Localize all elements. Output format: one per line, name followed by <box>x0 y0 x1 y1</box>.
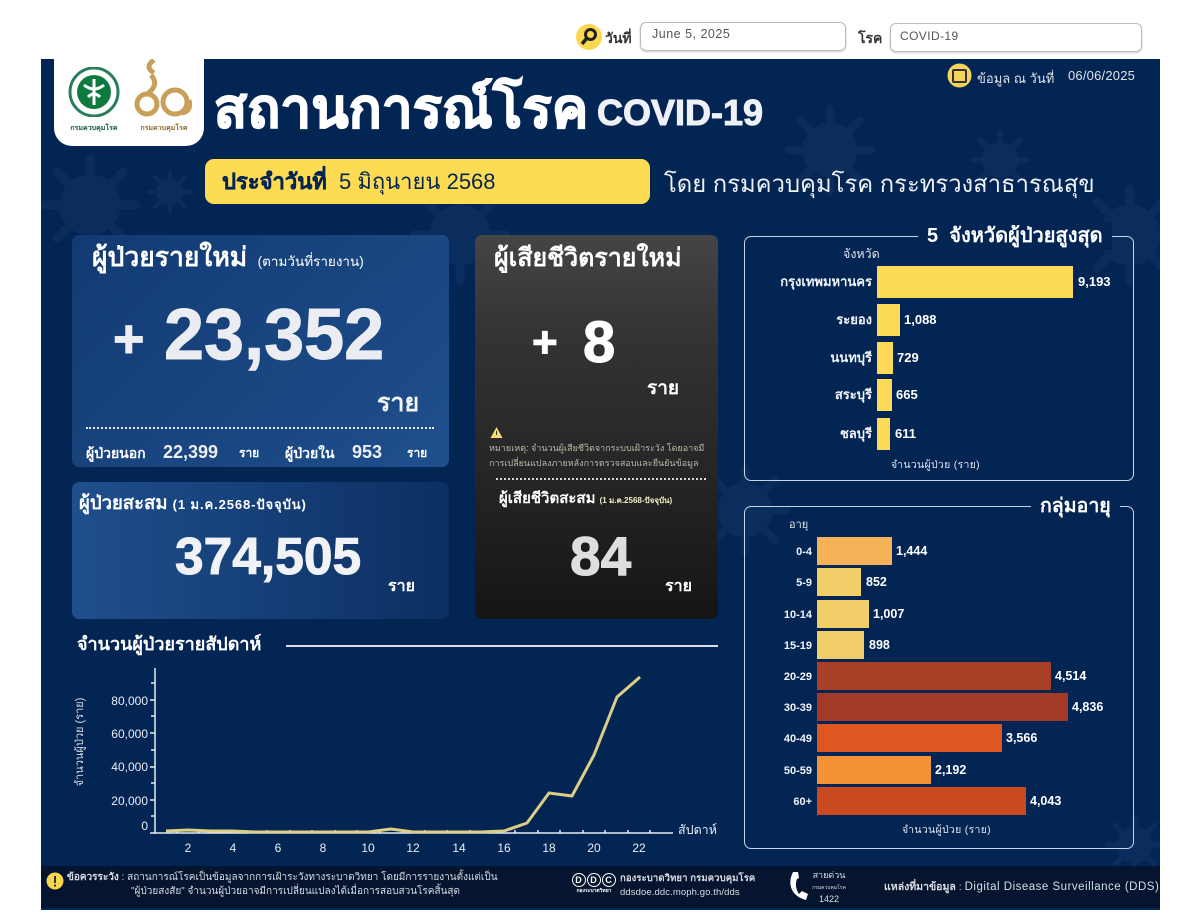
value: 1,444 <box>896 544 927 558</box>
label: 20-29 <box>784 671 812 683</box>
age row 20-29 <box>784 662 1086 690</box>
data source: แหล่งที่มาข้อมูล : Digital Disease Surveillance (DDS) <box>884 881 1159 893</box>
data line <box>166 677 640 832</box>
value: 4,043 <box>1030 794 1061 808</box>
label: กรุงเทพมหานคร <box>780 274 872 289</box>
hotline: 1422 <box>819 894 839 904</box>
bar <box>817 756 931 784</box>
hotline: สายด่วน <box>813 870 845 880</box>
weekly chart heading: จำนวนผู้ป่วยรายสัปดาห์ <box>77 634 261 654</box>
weekly line chart <box>74 668 717 855</box>
caution text: ข้อควรระวัง : สถานการณ์โรคเป็นข้อมูลจากการเฝ้าระวังทางระบาดวิทยา โดยมีการรายงานตั้งแต่เป็น <box>67 872 498 883</box>
axis title: จำนวนผู้ป่วย (ราย) <box>891 459 980 471</box>
cumulative deaths number: 84 <box>570 525 631 587</box>
data date value: 06/06/2025 <box>1068 68 1135 83</box>
x axis labels: 12 <box>406 841 420 855</box>
bar <box>817 600 869 628</box>
bar <box>817 568 861 596</box>
x axis labels: 6 <box>275 841 282 855</box>
x axis labels: 20 <box>587 841 601 855</box>
unit: ราย <box>388 578 415 595</box>
note: การเปลี่ยนแปลงภายหลังการตรวจสอบและยืนยันข้อมูล <box>489 458 699 468</box>
disease input: COVID-19 <box>900 29 959 43</box>
panel: cumulative cases <box>72 482 449 619</box>
DDC text: กองระบาดวิทยา กรมควบคุมโรค <box>620 873 755 884</box>
data date label: ข้อมูล ณ วันที่ <box>977 71 1054 86</box>
label: 50-59 <box>784 765 812 777</box>
label: 15-19 <box>784 640 812 652</box>
label: ระยอง <box>836 312 872 327</box>
bar <box>817 631 864 659</box>
DDC logo <box>572 873 616 894</box>
y axis labels: 40,000 <box>111 760 148 774</box>
x axis labels: 16 <box>497 841 511 855</box>
bar <box>817 537 892 565</box>
plus sign: + <box>532 318 558 367</box>
bar <box>817 787 1026 815</box>
age row 5-9 <box>796 568 887 596</box>
x axis labels: 22 <box>632 841 646 855</box>
heading <box>1031 492 1120 520</box>
caution text: "ผู้ป่วยสงสัย" จำนวนผู้ป่วยอาจมีการเปลี่ยนแปลงได้เมื่อการสอบสวนโรคสิ้นสุด <box>131 886 460 897</box>
age row 60+ <box>793 787 1061 815</box>
unit: ราย <box>665 578 692 595</box>
label: นนทบุรี <box>830 350 872 365</box>
value: 729 <box>897 350 919 365</box>
date input <box>640 22 846 51</box>
DDC text: ddsdoe.ddc.moph.go.th/dds <box>620 887 740 898</box>
bar <box>877 266 1073 298</box>
heading: 5 จังหวัดผู้ป่วยสูงสุด <box>927 225 1103 247</box>
dotted divider <box>86 427 434 429</box>
decorative virus pattern <box>41 104 1160 866</box>
label: 10-14 <box>784 609 812 621</box>
axes <box>150 668 673 833</box>
icon: search <box>576 24 602 50</box>
date label: วันที่ <box>605 30 632 46</box>
heading: ผู้ป่วยรายใหม่ (ตามวันที่รายงาน) <box>92 242 364 272</box>
COVID-19 title: COVID-19 <box>597 92 763 133</box>
value: 4,514 <box>1055 669 1086 683</box>
outpatient value: 22,399 <box>163 442 218 462</box>
bar <box>877 342 893 374</box>
age row 15-19 <box>784 631 890 659</box>
icon: caution <box>46 872 64 890</box>
disease label: โรค <box>858 30 882 46</box>
caution text <box>67 870 498 897</box>
label: 5-9 <box>796 577 812 589</box>
hotline <box>812 870 846 904</box>
heading rule <box>286 645 718 647</box>
label: ชลบุรี <box>840 426 872 441</box>
heading: กลุ่มอายุ <box>1040 495 1111 517</box>
date input: June 5, 2025 <box>652 27 730 41</box>
note: หมายเหตุ: จำนวนผู้เสียชีวิตจากระบบเฝ้าระวัง โดยอาจมี <box>489 443 704 453</box>
y axis title: จำนวนผู้ป่วย (ราย) <box>74 698 86 786</box>
province row: Nonthaburi <box>830 342 919 374</box>
province row: Chonburi <box>840 418 916 450</box>
unit: ราย <box>647 378 679 399</box>
department name: กรมควบคุมโรค <box>70 125 118 132</box>
DDC logo: กองระบาดวิทยา <box>577 888 611 894</box>
bar <box>817 693 1068 721</box>
y axis labels: 20,000 <box>111 794 148 808</box>
x axis labels: 2 <box>185 841 192 855</box>
bar <box>817 724 1002 752</box>
inpatient value: 953 <box>352 442 382 462</box>
age row 30-39 <box>784 693 1103 721</box>
x axis labels: 14 <box>452 841 466 855</box>
issuing department: โดย กรมควบคุมโรค กระทรวงสาธารณสุข <box>664 171 1095 198</box>
report date banner: ประจำวันที่ 5 มิถุนายน 2568 <box>222 169 496 194</box>
value: 898 <box>869 638 890 652</box>
DDC text <box>620 872 755 898</box>
label: สระบุรี <box>835 387 872 402</box>
age row 0-4 <box>796 537 928 565</box>
panel: new cases <box>72 235 449 467</box>
x axis title: สัปดาห์ <box>678 823 717 837</box>
footer <box>41 866 1160 908</box>
age row 40-49 <box>784 724 1037 752</box>
icon: warning <box>490 427 502 438</box>
icon: phone <box>790 872 808 900</box>
x axis labels: 4 <box>230 841 237 855</box>
age axis label: อายุ <box>789 519 808 531</box>
dotted divider <box>496 478 706 480</box>
unit: ราย <box>377 389 419 417</box>
value: 9,193 <box>1078 274 1111 289</box>
icon: calendar <box>948 64 972 88</box>
bar <box>877 379 892 411</box>
inpatient unit: ราย <box>407 446 427 460</box>
cumulative deaths heading: ผู้เสียชีวิตสะสม (1 ม.ค.2568-ปัจจุบัน) <box>499 490 672 507</box>
logo panel <box>54 59 204 146</box>
y axis labels: 0 <box>141 819 148 833</box>
bar <box>877 418 890 450</box>
hotline: กรมควบคุมโรค <box>812 885 846 891</box>
province axis label: จังหวัด <box>843 247 880 261</box>
outpatient unit: ราย <box>239 446 259 460</box>
x axis labels <box>185 841 646 855</box>
value: 3,566 <box>1006 731 1037 745</box>
DDC logo: D <box>575 875 582 885</box>
outpatient label: ผู้ป่วยนอก <box>86 445 146 461</box>
x axis labels: 10 <box>361 841 375 855</box>
y axis labels: 80,000 <box>111 694 148 708</box>
icon: 60th anniversary gold mark <box>134 59 192 116</box>
label: 0-4 <box>796 546 812 558</box>
value: 665 <box>896 387 918 402</box>
big number: 23,352 <box>164 295 384 375</box>
value: 852 <box>866 575 887 589</box>
age row 10-14 <box>784 600 904 628</box>
y axis labels <box>111 694 148 833</box>
bar <box>877 304 900 336</box>
heading: ผู้ป่วยสะสม (1 ม.ค.2568-ปัจจุบัน) <box>79 492 307 513</box>
bar <box>817 662 1051 690</box>
anniversary caption: กรมควบคุมโรค <box>140 125 188 132</box>
note <box>489 442 704 468</box>
label: 30-39 <box>784 702 812 714</box>
value: 2,192 <box>935 763 966 777</box>
x axis labels: 8 <box>320 841 327 855</box>
province row: Saraburi <box>835 379 918 411</box>
new deaths number: 8 <box>583 310 615 375</box>
age row 50-59 <box>784 756 966 784</box>
inpatient label: ผู้ป่วยใน <box>285 445 335 461</box>
value: 1,007 <box>873 607 904 621</box>
panel: age groups <box>744 506 1134 849</box>
value: 4,836 <box>1072 700 1103 714</box>
title <box>214 75 763 139</box>
Thai title: สถานการณ์โรค <box>214 79 589 139</box>
disease input <box>890 23 1142 52</box>
y axis labels: 60,000 <box>111 727 148 741</box>
label: 60+ <box>793 796 812 808</box>
data date note <box>948 64 1135 88</box>
report date banner <box>205 159 650 204</box>
label: 40-49 <box>784 733 812 745</box>
search filter bar <box>576 22 1143 54</box>
value: 1,088 <box>904 312 937 327</box>
cumulative number: 374,505 <box>175 527 361 585</box>
heading: ผู้เสียชีวิตรายใหม่ <box>494 244 682 272</box>
province row: Rayong <box>836 304 937 336</box>
icon: department seal <box>68 67 120 117</box>
axis title: จำนวนผู้ป่วย (ราย) <box>902 824 991 836</box>
DDC logo: D <box>590 875 597 885</box>
value: 611 <box>895 426 916 441</box>
panel: top 5 provinces <box>744 236 1134 481</box>
province row: Bangkok <box>780 266 1111 298</box>
panel: deaths <box>475 235 718 619</box>
patient split row <box>86 442 427 462</box>
x axis labels: 18 <box>542 841 556 855</box>
plus sign: + <box>113 309 145 369</box>
DDC logo: C <box>605 875 612 885</box>
